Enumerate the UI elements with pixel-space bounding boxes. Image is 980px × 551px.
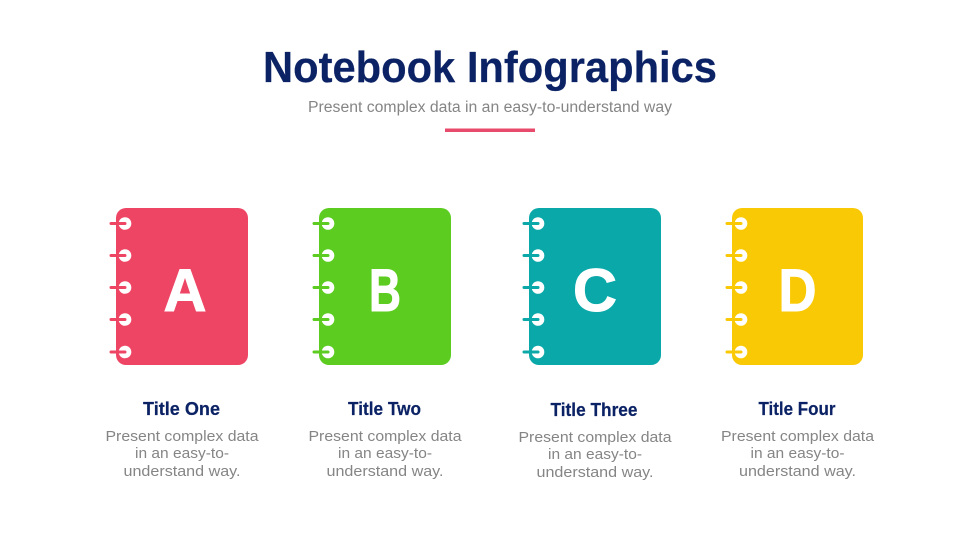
column four text: Title Four xyxy=(758,399,836,419)
title: Notebook Infographics xyxy=(263,43,717,92)
column one text: Present complex data xyxy=(106,429,260,445)
column two text: Present complex data xyxy=(308,429,463,445)
column one text: understand way. xyxy=(124,464,240,480)
column one text: Title One xyxy=(143,399,220,419)
column three text: in an easy-to- xyxy=(548,447,642,463)
column one text xyxy=(106,399,260,480)
accent underline xyxy=(445,128,535,132)
notebook C: C xyxy=(573,257,617,324)
column one text: in an easy-to- xyxy=(135,446,229,462)
notebook B xyxy=(314,208,451,365)
column three text: understand way. xyxy=(536,465,654,481)
column two text xyxy=(308,399,463,480)
column three text xyxy=(518,400,673,481)
subtitle: Present complex data in an easy-to-understand way xyxy=(308,99,672,116)
notebook C xyxy=(524,208,661,365)
column four text xyxy=(721,399,875,480)
column four text: Present complex data xyxy=(721,429,875,445)
notebook B: B xyxy=(369,257,401,324)
column three text: Title Three xyxy=(550,400,638,420)
column four text: understand way. xyxy=(739,464,856,480)
column two text: understand way. xyxy=(326,464,444,480)
column three text: Present complex data xyxy=(518,430,673,446)
notebook D xyxy=(727,208,863,365)
notebook A: A xyxy=(164,257,206,324)
column two text: Title Two xyxy=(348,399,421,419)
column four text: in an easy-to- xyxy=(750,446,845,462)
notebook A xyxy=(111,208,248,365)
column two text: in an easy-to- xyxy=(338,446,432,462)
notebook D: D xyxy=(778,257,816,324)
